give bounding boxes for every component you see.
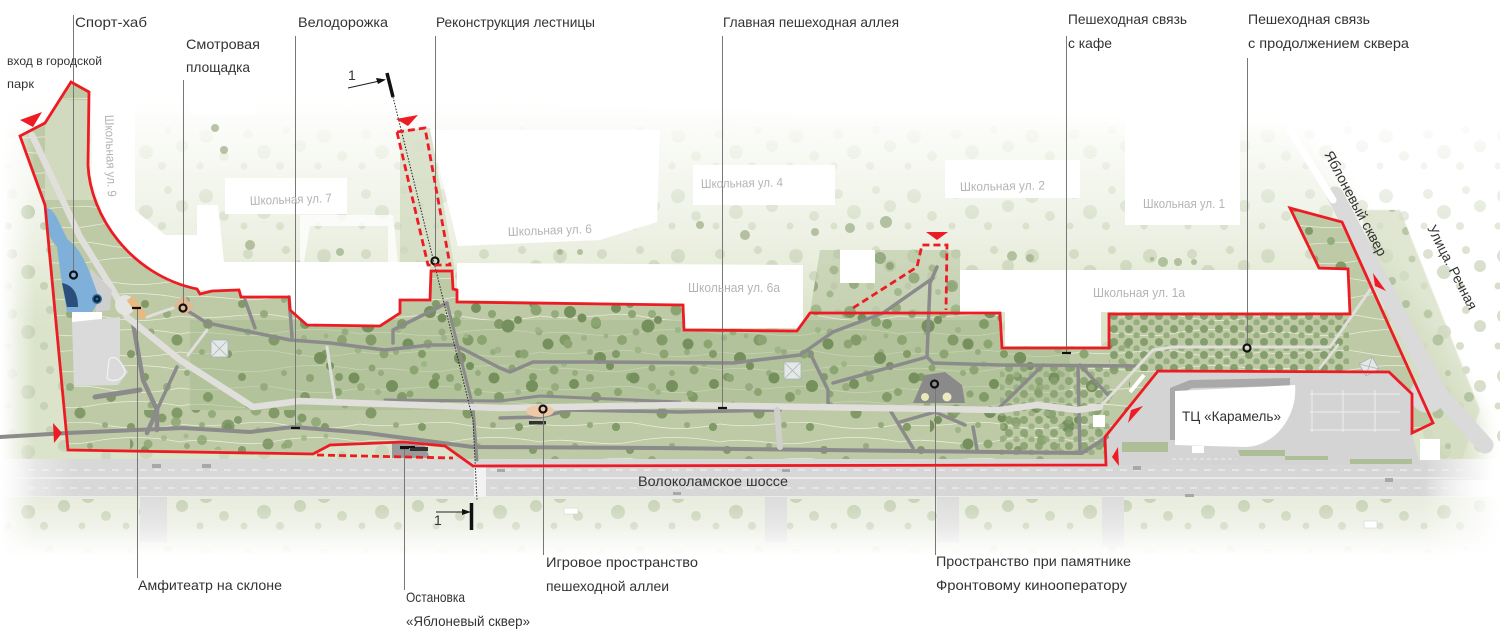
callout labels: «Яблоневый сквер» — [406, 613, 530, 629]
shopping centre building — [1175, 385, 1295, 447]
section line 1-1 — [348, 67, 477, 530]
callout labels: Амфитеатр на склоне — [138, 577, 282, 593]
background yards green — [5, 124, 1500, 459]
leader lines — [74, 15, 1248, 590]
callout labels: Смотровая — [186, 36, 260, 52]
street labels — [638, 148, 1481, 489]
callout labels: Пешеходная связь — [1248, 11, 1370, 27]
callout labels: Спорт-хаб — [75, 14, 147, 30]
building address labels — [102, 115, 1225, 300]
pond surface — [46, 208, 100, 312]
building address labels: Школьная ул. 6а — [688, 281, 780, 295]
bus stop — [392, 442, 430, 458]
red site boundary — [20, 82, 1433, 466]
building address labels: Школьная ул. 1а — [1093, 286, 1185, 300]
section line 1-1: 1 — [348, 67, 356, 83]
callout labels: Пешеходная связь — [1068, 11, 1187, 27]
grey secondary paths — [0, 267, 1137, 460]
playground — [526, 405, 554, 424]
right boulevard sidewalk — [1290, 130, 1485, 445]
small pavilions south of highway — [564, 508, 1377, 528]
callout labels: Велодорожка — [298, 14, 388, 30]
highway — [0, 459, 1500, 497]
red dashed boundaries — [317, 128, 947, 458]
residential buildings white — [92, 70, 1350, 346]
callout labels: вход в городской — [7, 54, 102, 68]
callout labels: с кафе — [1068, 35, 1112, 51]
green strip south of highway — [6, 497, 1486, 550]
street labels: Яблоневый сквер — [1321, 148, 1391, 259]
left and right fade edges — [0, 100, 1500, 560]
monument plaza — [913, 372, 965, 403]
marker ticks — [132, 308, 1071, 448]
callout labels: Главная пешеходная аллея — [723, 14, 899, 30]
lawn squares — [211, 340, 1379, 379]
callout labels: Фронтовому кинооператору — [936, 577, 1127, 593]
sports court — [72, 317, 128, 386]
callout labels: Остановка — [406, 589, 465, 605]
building address labels: Школьная ул. 6 — [508, 222, 592, 239]
street labels: Улица. Речная — [1424, 222, 1481, 312]
callout labels: Реконструкция лестницы — [436, 14, 595, 30]
callout labels: площадка — [186, 59, 250, 75]
building address labels: Школьная ул. 1 — [1143, 197, 1225, 211]
building address labels: Школьная ул. 7 — [250, 191, 332, 208]
marker rings — [70, 258, 1250, 412]
building address labels: Школьная ул. 4 — [701, 176, 783, 191]
red entrance arrows — [20, 112, 1386, 466]
callout labels: с продолжением сквера — [1248, 35, 1409, 51]
street labels: ТЦ «Карамель» — [1182, 408, 1281, 424]
street labels: Волоколамское шоссе — [638, 473, 788, 489]
light pedestrian alley — [32, 135, 1370, 447]
callout labels: парк — [7, 77, 35, 91]
building address labels: Школьная ул. 9 — [102, 115, 119, 197]
shopping centre and parking — [1093, 371, 1440, 465]
callout labels: Пространство при памятнике — [936, 553, 1131, 569]
callout labels: пешеходной аллеи — [546, 578, 669, 594]
building address labels: Школьная ул. 2 — [960, 179, 1045, 194]
viewing platform — [174, 295, 194, 315]
section line 1-1: 1 — [434, 512, 442, 528]
park territory with trees — [0, 80, 1500, 470]
callout labels: Игровое пространство — [546, 554, 698, 570]
sports hub — [46, 208, 144, 386]
